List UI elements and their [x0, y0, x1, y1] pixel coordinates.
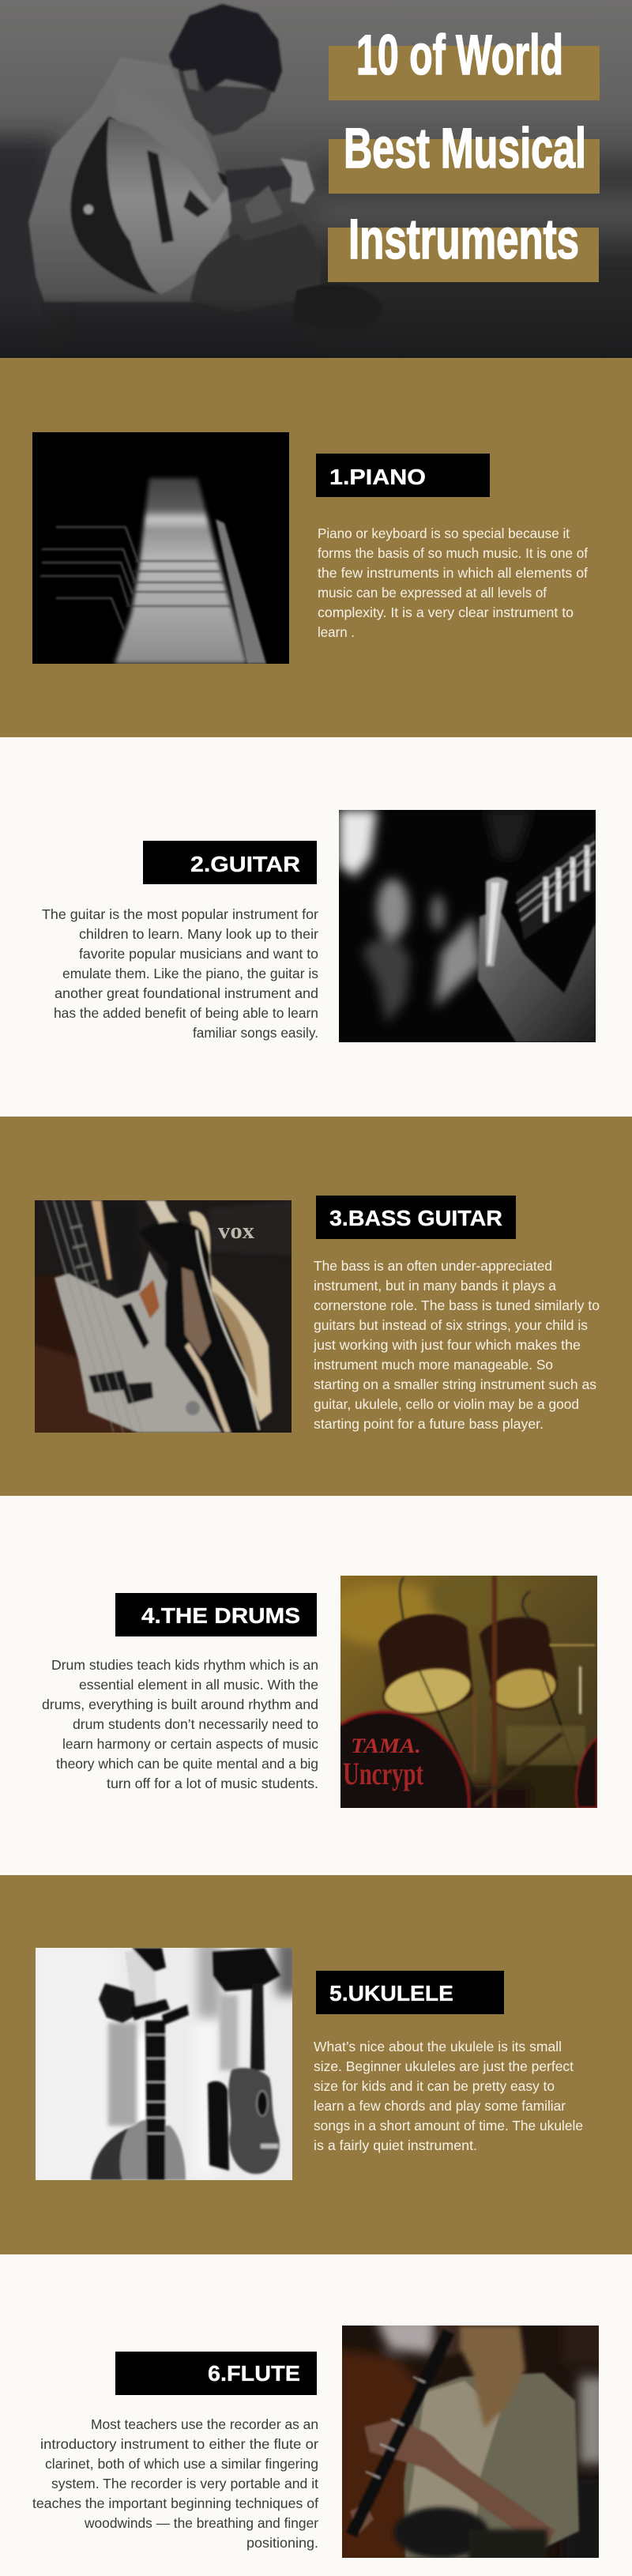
- text: ukulele description: learn a few chords and play some familiar: [314, 2098, 566, 2114]
- text: drums description: turn off for a lot of music students.: [107, 1776, 318, 1791]
- text: guitar description: favorite popular musicians and want to: [79, 946, 318, 962]
- heading: 6.flute: 6.FLUTE: [208, 2361, 300, 2386]
- text: flute description: introductory instrument to either the flute or: [40, 2436, 318, 2452]
- photo: guitar fretting hand: [339, 810, 596, 1042]
- text: bass guitar description: starting point for a future bass player.: [314, 1416, 544, 1432]
- text: flute description: Most teachers use the recorder as an: [91, 2416, 318, 2432]
- text: bass guitar description: cornerstone role. The bass is tuned similarly to: [314, 1297, 600, 1313]
- text: drums description: learn harmony or certain aspects of music: [62, 1736, 318, 1752]
- panel: hero header: [0, 0, 632, 375]
- title bar backgrounds: [328, 46, 600, 282]
- text: ukulele description: [314, 2039, 583, 2153]
- text: bass guitar description: guitar, ukulele, cello or violin may be a good: [314, 1396, 579, 1412]
- heading: 4.the drums: 4.THE DRUMS: [141, 1603, 300, 1628]
- heading: 1.piano: [316, 454, 490, 497]
- photo text: amp logo: vox: [218, 1219, 254, 1244]
- panel: 5 ukulele: [0, 1875, 632, 2254]
- photo text: drum logos: TAMA.: [351, 1734, 421, 1757]
- text: guitar description: familiar songs easily.: [193, 1025, 318, 1041]
- heading: 1.piano: 1.PIANO: [329, 465, 426, 489]
- photo: bass guitars: [35, 1200, 292, 1433]
- panel: 2 guitar: [0, 737, 632, 1117]
- text: flute description: woodwinds — the breathing and finger: [84, 2515, 318, 2531]
- text: ukulele description: What’s nice about the ukulele is its small: [314, 2039, 562, 2054]
- text: piano description: complexity. It is a very clear instrument to: [318, 604, 574, 620]
- text: guitar description: children to learn. Many look up to their: [79, 926, 318, 942]
- text: piano description: [318, 525, 588, 640]
- text: drums description: drums, everything is built around rhythm and: [42, 1697, 318, 1712]
- text: piano description: forms the basis of so much music. It is one of: [318, 545, 588, 561]
- text: bass guitar description: [313, 1258, 600, 1432]
- heading: 5.ukulele: 5.UKULELE: [329, 1981, 453, 2005]
- photo: drum kit: Uncrypt: [343, 1756, 423, 1791]
- photo: musician playing clarinet: [342, 2326, 599, 2558]
- heading: 2.guitar: 2.GUITAR: [190, 852, 300, 876]
- panel: 4 the drums: [0, 1496, 632, 1898]
- photo: piano keys: [32, 432, 289, 664]
- text: flute description: [32, 2416, 318, 2551]
- text: flute description: teaches the important beginning techniques of: [32, 2495, 318, 2511]
- text: ukulele description: size. Beginner ukuleles are just the perfect: [314, 2058, 574, 2074]
- text: ukulele description: songs in a short amount of time. The ukulele: [314, 2118, 583, 2133]
- text: drums description: Drum studies teach kids rhythm which is an: [51, 1657, 318, 1673]
- heading: 2.guitar: [143, 841, 317, 884]
- photo: ukuleles on wall: [36, 1948, 292, 2180]
- text: guitar description: has the added benefit of being able to learn: [54, 1005, 318, 1021]
- text: drums description: essential element in all music. With the: [79, 1677, 318, 1693]
- text: guitar description: another great foundational instrument and: [55, 985, 318, 1001]
- text: ukulele description: is a fairly quiet instrument.: [314, 2137, 477, 2153]
- text: ukulele description: size for kids and it can be pretty easy to: [314, 2078, 555, 2094]
- text: piano description: the few instruments in which all elements of: [318, 565, 588, 581]
- text: guitar description: The guitar is the most popular instrument for: [42, 906, 318, 922]
- text: piano description: Piano or keyboard is so special because it: [318, 525, 570, 541]
- title: [344, 24, 586, 271]
- text: guitar description: [42, 906, 318, 1041]
- text: piano description: learn .: [318, 624, 355, 640]
- heading: 3.bass guitar: 3.BASS GUITAR: [329, 1206, 502, 1230]
- text: bass guitar description: starting on a smaller string instrument such as: [314, 1377, 596, 1392]
- heading: 3.bass guitar: [316, 1196, 516, 1239]
- heading: 6.flute: [115, 2352, 317, 2395]
- text: drums description: drum students don’t necessarily need to: [73, 1716, 318, 1732]
- photo: drum kit: [340, 1576, 597, 1808]
- text: piano description: music can be expressed at all levels of: [318, 585, 547, 601]
- panel: 3 bass guitar: [0, 1117, 632, 1496]
- text: flute description: system. The recorder is very portable and it: [51, 2476, 318, 2491]
- photo: boy playing guitar: [28, 4, 382, 336]
- text: bass guitar description: guitars but instead of six strings, your child is: [314, 1317, 588, 1333]
- text: bass guitar description: instrument much more manageable. So: [314, 1357, 553, 1373]
- text: bass guitar description: instrument, but in many bands it plays a: [314, 1278, 556, 1294]
- text: drums description: [42, 1657, 318, 1791]
- text: guitar description: emulate them. Like the piano, the guitar is: [62, 966, 318, 981]
- text: flute description: positioning.: [246, 2535, 318, 2551]
- text: flute description: clarinet, both of which use a similar fingering: [45, 2456, 318, 2472]
- panel: 6 flute: [0, 2254, 632, 2576]
- heading: 4.the drums: [115, 1593, 317, 1636]
- heading: 5.ukulele: [316, 1971, 504, 2014]
- text: drums description: theory which can be quite mental and a big: [56, 1756, 318, 1772]
- text: bass guitar description: The bass is an often under-appreciated: [314, 1258, 552, 1274]
- text: bass guitar description: just working with just four which makes the: [313, 1337, 581, 1353]
- panel: 1 piano: [0, 358, 632, 737]
